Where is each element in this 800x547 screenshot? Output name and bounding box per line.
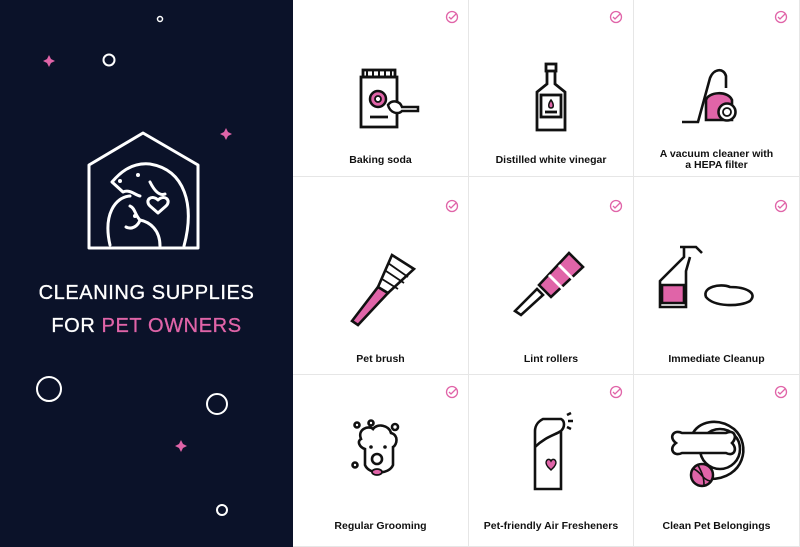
check icon (774, 386, 788, 398)
panel: baking soda (293, 0, 469, 177)
check icon (774, 10, 788, 24)
icon: brush (350, 253, 416, 327)
label: Pet-friendly Air Fresheners (484, 520, 618, 532)
panel: grooming (293, 375, 469, 547)
label: Lint rollers (524, 353, 578, 365)
label: Distilled white vinegar (496, 154, 606, 166)
label: A vacuum cleaner with (660, 148, 773, 160)
title: FOR PET OWNERS (51, 315, 242, 337)
label (660, 148, 773, 171)
check icon (774, 200, 788, 212)
icon: vacuum (682, 68, 737, 124)
panel: immediate cleanup (634, 177, 800, 375)
panel: left title panel (0, 0, 293, 547)
title (39, 282, 254, 337)
check icon (446, 10, 458, 24)
label: Immediate Cleanup (668, 353, 765, 365)
icon: lint roller (513, 251, 585, 317)
panel: pet brush (293, 177, 469, 375)
panel: air fresheners (469, 375, 634, 547)
check icon (610, 386, 622, 398)
check icon (610, 10, 622, 24)
icon: spray bottle (534, 412, 573, 490)
label: Pet brush (356, 353, 405, 365)
label: Regular Grooming (334, 520, 427, 532)
panel: pet belongings (634, 375, 800, 547)
icon: bottle (536, 62, 566, 132)
icon: spray and puddle (658, 246, 754, 308)
check icon (610, 200, 622, 212)
panel: lint rollers (469, 177, 634, 375)
check icon (446, 386, 458, 398)
label: Clean Pet Belongings (663, 520, 770, 532)
label: a HEPA filter (685, 159, 748, 171)
check icon (446, 200, 458, 212)
icon: poodle (351, 419, 400, 476)
icon: bone, bowl and ball (670, 420, 745, 488)
label: Baking soda (349, 154, 412, 166)
icon: pet house (88, 132, 200, 250)
title: CLEANING SUPPLIES (39, 282, 254, 304)
panel: vinegar (469, 0, 634, 177)
decorative sparkles and bubbles (36, 16, 232, 516)
icon: baking soda box (360, 68, 420, 128)
panel: vacuum (634, 0, 800, 177)
